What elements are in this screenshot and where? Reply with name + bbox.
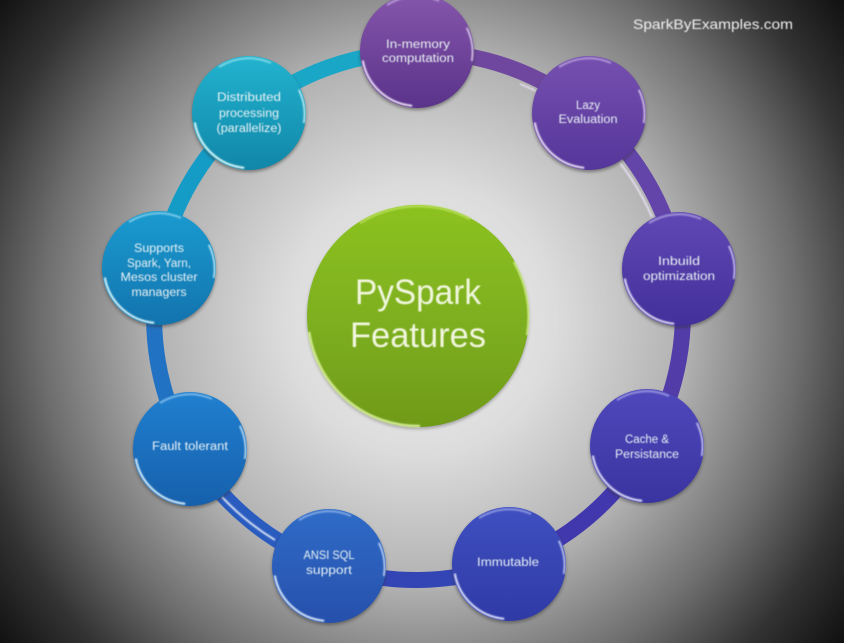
node: ANSI SQL support: ANSI SQL: [304, 550, 355, 562]
ring connector: [154, 52, 683, 580]
node: Cache & Persistance: [590, 389, 704, 505]
node: Lazy Evaluation: Evaluation: [558, 114, 618, 126]
title: Features: [350, 316, 486, 355]
node: ANSI SQL support: [272, 509, 386, 625]
node: Inbuild optimization: [622, 212, 736, 328]
title: [350, 273, 486, 355]
node: Supports Spark, Yarn, Mesos cluster managers: [102, 211, 216, 327]
node: Distributed processing (parallelize): processing: [219, 108, 279, 120]
node: In-memory computation: [360, 0, 474, 110]
node: Supports Spark, Yarn, Mesos cluster managers: Spark, Yarn,: [127, 258, 191, 270]
node: Inbuild optimization: optimization: [643, 271, 715, 283]
node: Cache & Persistance: Cache &: [625, 434, 669, 446]
node: ANSI SQL support: support: [306, 565, 353, 577]
node: Supports Spark, Yarn, Mesos cluster managers: Supports: [134, 243, 184, 255]
node: Fault tolerant: [133, 392, 247, 508]
node: In-memory computation: In-memory: [386, 39, 450, 51]
node: Cache & Persistance: Persistance: [615, 449, 679, 461]
title: PySpark: [355, 273, 481, 312]
watermark: SparkByExamples.com: SparkByExamples.com: [633, 16, 793, 32]
node: Fault tolerant: Fault tolerant: [152, 441, 229, 453]
node: Supports Spark, Yarn, Mesos cluster managers: Mesos cluster: [120, 272, 198, 284]
node: Immutable: [452, 507, 566, 623]
node: Lazy Evaluation: [532, 56, 646, 172]
node: Distributed processing (parallelize): [192, 56, 306, 172]
node: In-memory computation: computation: [382, 53, 454, 65]
node: Immutable: Immutable: [477, 557, 539, 569]
node: Distributed processing (parallelize): (parallelize): [216, 123, 282, 135]
node: Supports Spark, Yarn, Mesos cluster managers: managers: [132, 287, 187, 299]
node: Inbuild optimization: Inbuild: [658, 256, 700, 268]
node: Distributed processing (parallelize): Distributed: [217, 92, 281, 104]
centre circle: PySpark Features: [307, 205, 529, 429]
node: Lazy Evaluation: Lazy: [576, 100, 600, 112]
